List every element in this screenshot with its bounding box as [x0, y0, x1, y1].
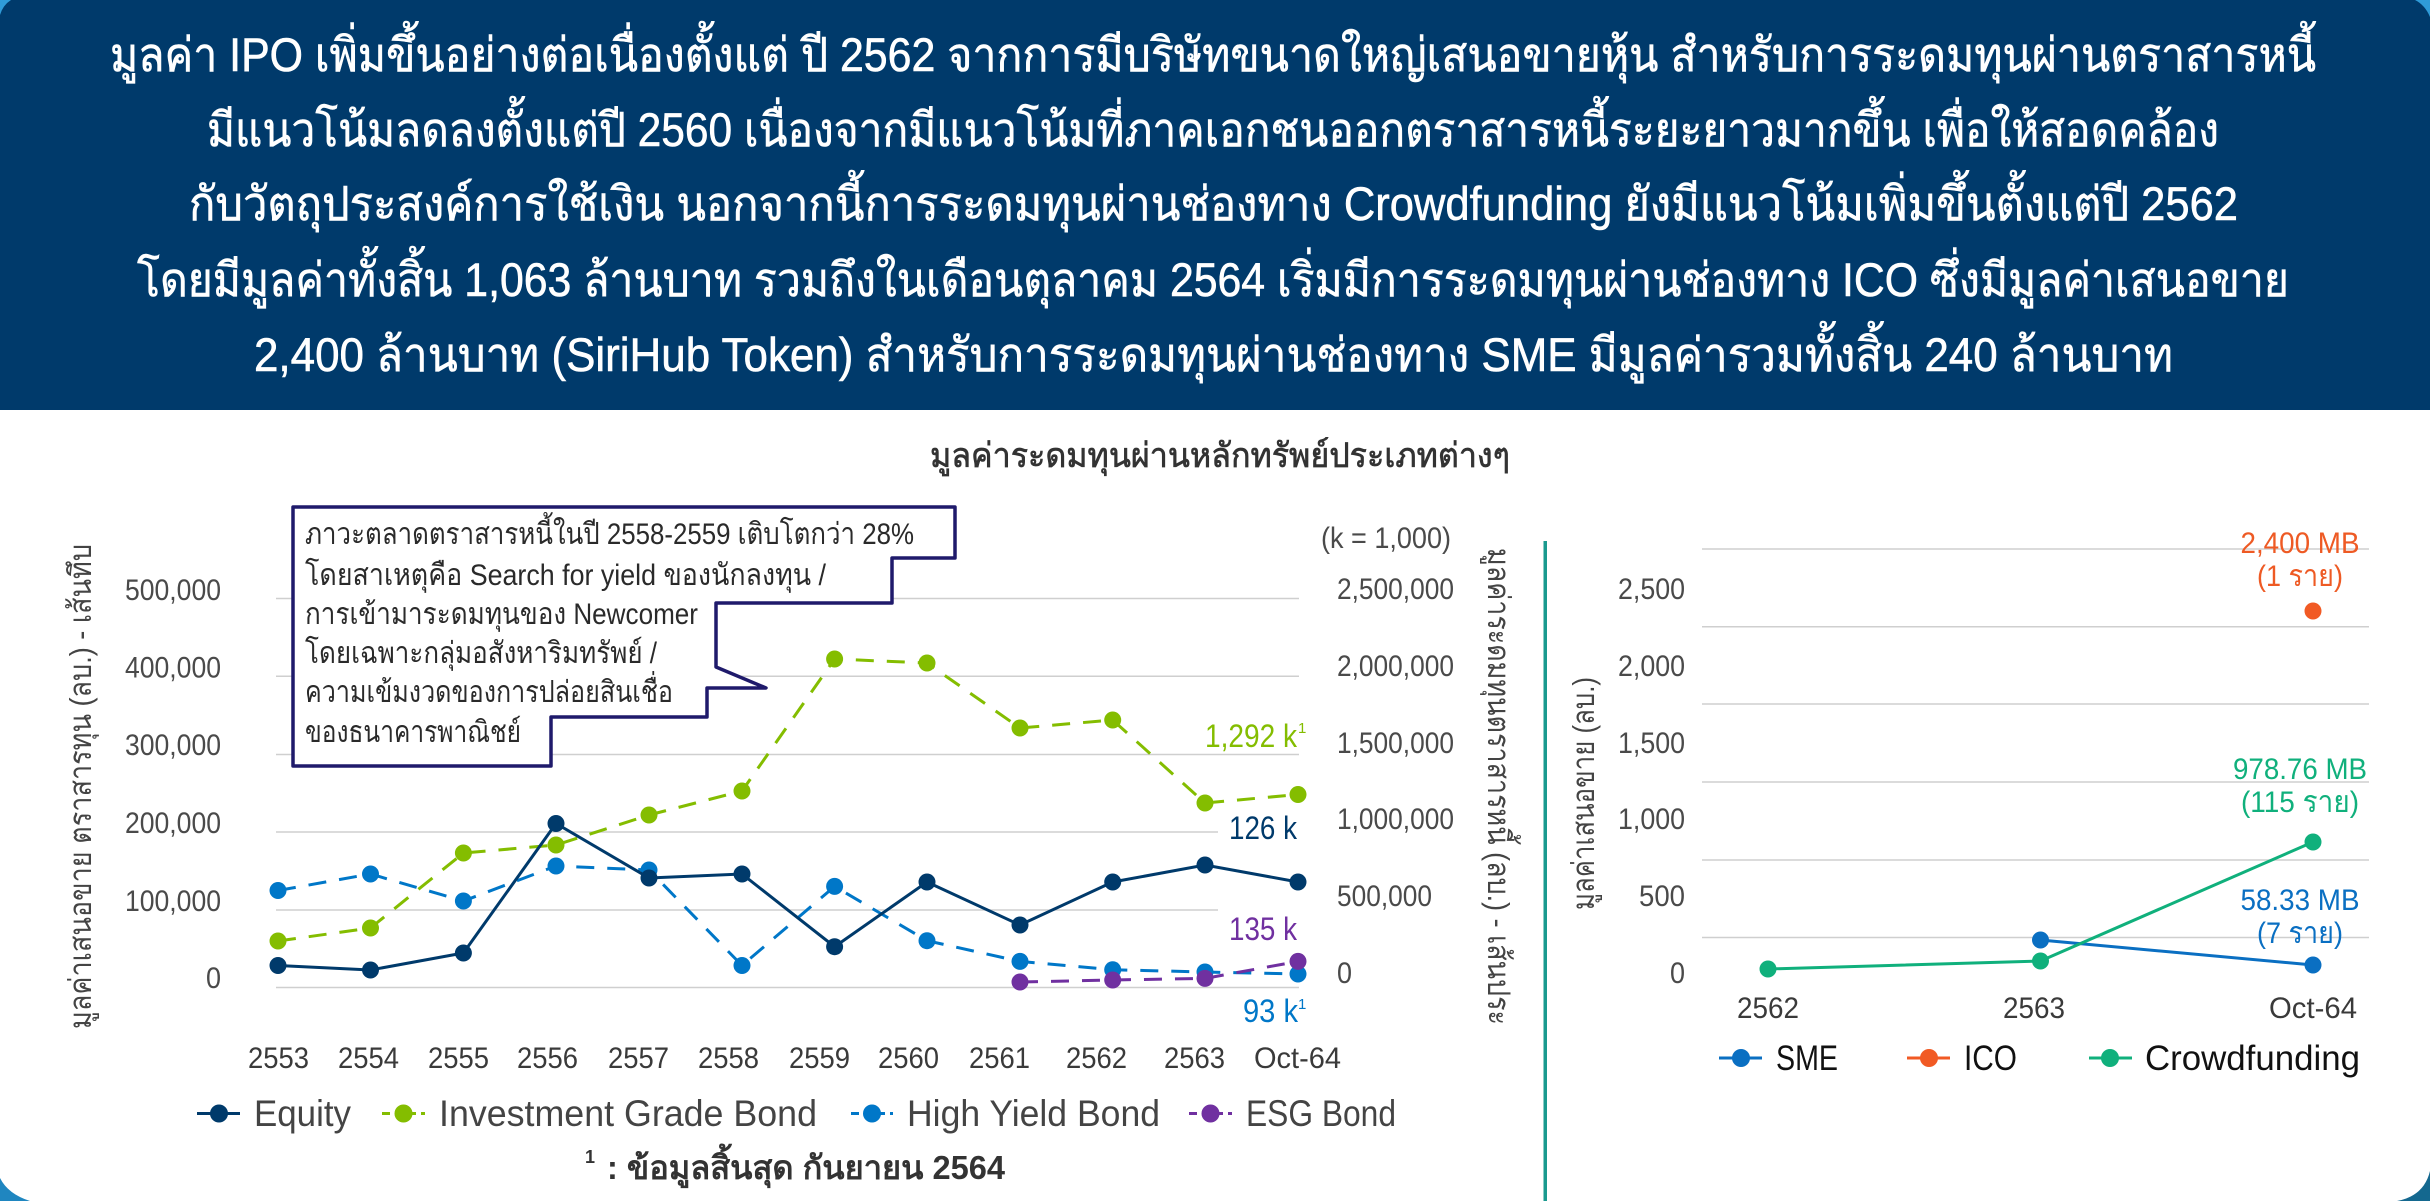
series: sme: [2032, 932, 2322, 974]
data labels: 126 k: [1229, 810, 1298, 846]
x axis labels: 2554: [338, 1042, 399, 1075]
y axis labels: 2,500: [1618, 573, 1685, 606]
data labels: [1205, 718, 1306, 1029]
left axis labels: 500,000: [125, 574, 221, 607]
data label: sme: [2240, 884, 2360, 950]
left axis title: มูลค่าเสนอขาย ตราสารทุน (ลบ.) - เส้นทึบ: [63, 544, 100, 1029]
x axis labels: 2553: [248, 1042, 309, 1075]
series: esg bond: [1012, 953, 1306, 990]
y axis labels: 2,000: [1618, 650, 1685, 683]
data label: crowdfunding: 978.76 MB: [2233, 753, 2367, 786]
data labels: 1: [1298, 996, 1306, 1013]
data label: crowdfunding: (115 ราย): [2241, 786, 2359, 819]
data labels: 93 k: [1243, 993, 1299, 1029]
legend: left chart: [197, 1093, 1396, 1134]
right axis labels: [1337, 573, 1454, 990]
callout: ภาวะตลาดตราสารหนี้ในปี 2558-2559 เติบโตกว่า 28%: [305, 512, 914, 551]
data label: sme: 58.33 MB: [2240, 884, 2360, 917]
x axis labels: 2563: [1164, 1042, 1225, 1075]
x axis labels: 2561: [969, 1042, 1030, 1075]
data label: crowdfunding: [2233, 753, 2367, 819]
y axis labels: 500: [1639, 880, 1685, 913]
callout: ความเข้มงวดของการปล่อยสินเชื่อ: [305, 671, 673, 709]
series: crowdfunding: [1760, 834, 2322, 978]
right axis labels: 500,000: [1337, 880, 1432, 913]
right axis labels: 0: [1337, 957, 1352, 990]
data label: ico: 2,400 MB: [2240, 527, 2360, 560]
x axis labels: 2555: [428, 1042, 489, 1075]
corner: bottom right: [2397, 1171, 2430, 1201]
header text block: มีแนวโน้มลดลงตั้งแต่ปี 2560 เนื่องจากมีแนวโน้มที่ภาคเอกชนออกตราสารหนี้ระยะยาวมากขึ้น เพื่อให้สอดคล้อง: [207, 96, 2219, 156]
series: equity: [270, 815, 1306, 978]
grid lines: [276, 598, 1299, 988]
legend: right chart: SME: [1776, 1039, 1838, 1078]
left axis labels: 100,000: [125, 885, 221, 918]
callout: การเข้ามาระดมทุนของ Newcomer: [305, 598, 698, 633]
left axis labels: 400,000: [125, 652, 221, 684]
header text block: [110, 21, 2316, 384]
legend: left chart: ESG Bond: [1246, 1093, 1396, 1134]
left axis labels: 300,000: [125, 729, 221, 762]
data label: sme: (7 ราย): [2257, 917, 2343, 950]
header text block: กับวัตถุประสงค์การใช้เงิน นอกจากนี้การระดมทุนผ่านช่องทาง Crowdfunding ยังมีแนวโน้มเพิ่มขึ้นตั้งแต่ปี 2562: [189, 170, 2238, 233]
x axis labels: 2559: [789, 1042, 850, 1075]
x axis labels: 2563: [2003, 992, 2065, 1025]
chart title: มูลค่าระดมทุนผ่านหลักทรัพย์ประเภทต่างๆ: [930, 437, 1510, 476]
divider: teal vertical line: [1544, 541, 1547, 1201]
right axis labels: 1,000,000: [1337, 803, 1454, 836]
grid lines: [1702, 549, 2369, 938]
y axis labels: 1,000: [1618, 803, 1685, 836]
right axis labels: 2,500,000: [1337, 573, 1454, 606]
series: ico: [2304, 602, 2322, 620]
footnote: : ข้อมูลสิ้นสุด กันยายน 2564: [607, 1143, 1006, 1189]
x axis labels: 2557: [608, 1042, 669, 1075]
corner: bottom left: [0, 1178, 30, 1201]
legend: right chart: ICO: [1964, 1039, 2017, 1078]
x axis labels: [1737, 992, 2357, 1025]
callout: โดยสาเหตุคือ Search for yield ของนักลงทุน /: [305, 557, 827, 594]
callout: ของธนาคารพาณิชย์: [305, 715, 521, 749]
data labels: 135 k: [1229, 911, 1298, 947]
right axis title: มูลค่าระดมทุนตราสารหนี้ (ลบ.) - เส้นประ: [1479, 548, 1521, 1025]
left axis labels: [125, 574, 221, 995]
footnote: 1: [585, 1147, 595, 1167]
left axis labels: 0: [206, 962, 221, 995]
x axis labels: [248, 1042, 1341, 1075]
callout: โดยเฉพาะกลุ่มอสังหาริมทรัพย์ /: [305, 635, 658, 672]
data label: ico: (1 ราย): [2257, 560, 2343, 593]
callout: [293, 507, 955, 766]
x axis labels: 2562: [1066, 1042, 1127, 1075]
x axis labels: Oct-64: [2269, 992, 2357, 1025]
legend: left chart: Investment Grade Bond: [439, 1093, 817, 1134]
right axis labels: 2,000,000: [1337, 650, 1454, 683]
x axis labels: 2558: [698, 1042, 759, 1075]
data label: ico: [2240, 527, 2360, 593]
x axis labels: 2562: [1737, 992, 1799, 1025]
panel: right line chart: [1566, 527, 2369, 1078]
series: high yield bond: [270, 858, 1306, 982]
y axis labels: 1,500: [1618, 727, 1685, 760]
left axis labels: 200,000: [125, 807, 221, 840]
x axis labels: 2560: [878, 1042, 939, 1075]
y axis title: มูลค่าเสนอขาย (ลบ.): [1566, 677, 1602, 910]
x axis labels: 2556: [517, 1042, 578, 1075]
panel: left line chart: [63, 507, 1521, 1189]
legend: left chart: High Yield Bond: [907, 1093, 1160, 1134]
header text block: 2,400 ล้านบาท (SiriHub Token) สำหรับการระดมทุนผ่านช่องทาง SME มีมูลค่ารวมทั้งสิ้น 240 ล้านบาท: [254, 321, 2173, 384]
right axis labels: 1,500,000: [1337, 727, 1454, 760]
legend: left chart: Equity: [254, 1093, 351, 1134]
y axis labels: 0: [1670, 957, 1685, 990]
legend: right chart: Crowdfunding: [2145, 1039, 2360, 1078]
note: k unit: (k = 1,000): [1321, 522, 1451, 555]
data labels: 1,292 k: [1205, 718, 1298, 754]
data labels: 1: [1298, 720, 1306, 737]
y axis labels: [1618, 573, 1685, 990]
legend: right chart: [1719, 1039, 2360, 1078]
header panel: [0, 0, 2430, 410]
x axis labels: Oct-64: [1254, 1042, 1341, 1075]
series: investment grade bond: [270, 650, 1306, 950]
